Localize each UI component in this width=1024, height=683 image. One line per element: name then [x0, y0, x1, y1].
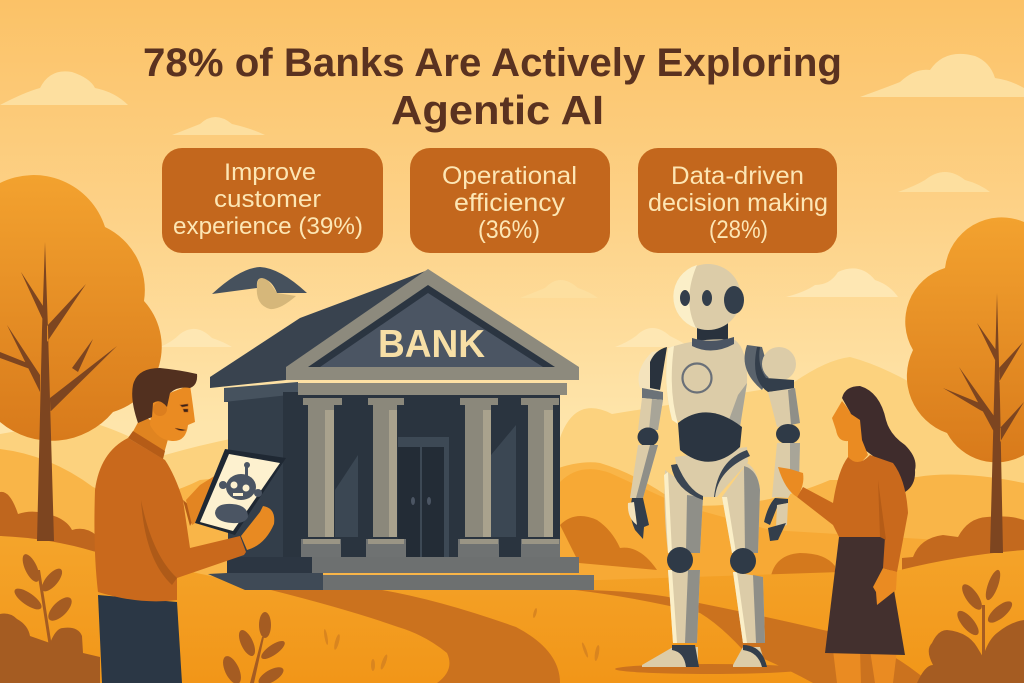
bank pediment: [286, 269, 579, 380]
callout: operational efficiency: efficiency: [454, 189, 566, 217]
robot waist: [678, 412, 742, 462]
bank steps: [227, 557, 312, 573]
background hills: [0, 357, 1024, 683]
bank frieze: [298, 383, 567, 395]
man trousers: [98, 595, 182, 683]
man hair: [132, 368, 197, 423]
man ear: [153, 402, 167, 416]
callout: improve customer experience: [162, 148, 383, 253]
man front hand: [241, 506, 274, 550]
icon: bird: [212, 267, 307, 309]
man eye: [175, 404, 188, 431]
bushes: [0, 492, 1024, 583]
title: 78% of Banks Are Actively Exploring: [143, 41, 842, 85]
decorative plants: [0, 552, 1024, 683]
woman lower hand: [873, 568, 897, 605]
bank label: BANK: [378, 323, 485, 366]
clouds: [0, 54, 1024, 347]
bank roof: [210, 270, 428, 388]
man sweater: [94, 438, 246, 601]
robot legs: [642, 463, 767, 667]
woman sweater: [797, 455, 908, 572]
bank side wall: [224, 388, 300, 557]
man head: [150, 385, 195, 441]
foreground ground: [0, 536, 1024, 683]
woman skirt: [825, 537, 905, 655]
callout: data-driven decision making: [638, 148, 837, 253]
robot shadow: [615, 664, 805, 674]
callout: improve customer experience: Improve: [224, 159, 316, 186]
bank front wall: [283, 392, 560, 557]
callout: data-driven decision making: Data-driven: [671, 162, 804, 190]
bank columns: [301, 398, 560, 557]
woman legs: [833, 650, 897, 683]
robot head: [673, 264, 744, 330]
woman raised hand: [778, 467, 803, 497]
robot right arm: [745, 345, 800, 541]
robot neck: [697, 322, 728, 342]
man with tablet: [94, 368, 286, 683]
robot chest ring: [682, 364, 712, 392]
robot left arm: [628, 347, 667, 539]
robot torso: [666, 339, 747, 427]
callout: improve customer experience: experience (39%): [173, 213, 363, 240]
bank door: [398, 437, 449, 557]
bank building: [208, 269, 594, 590]
tablet: [195, 449, 286, 535]
woman: [778, 386, 916, 683]
callout: data-driven decision making: decision making: [648, 189, 828, 217]
title: [143, 41, 842, 133]
callout: operational efficiency: Operational: [442, 162, 577, 190]
callout: operational efficiency: [410, 148, 610, 253]
woman face: [832, 401, 868, 466]
right tree: [905, 217, 1024, 553]
title: Agentic AI: [391, 87, 604, 133]
robot pelvis: [675, 447, 748, 497]
robot: [615, 264, 805, 674]
callout: data-driven decision making: (28%): [709, 216, 768, 244]
left tree: [0, 175, 162, 541]
callout: improve customer experience: customer: [214, 186, 321, 213]
tablet robot icon: [215, 462, 262, 523]
woman hair: [842, 386, 916, 492]
grass tufts: [323, 608, 600, 671]
man neck: [130, 415, 170, 457]
winding road: [271, 590, 930, 683]
callout: operational efficiency: (36%): [478, 216, 540, 244]
man back hand: [186, 475, 216, 525]
robot collar: [692, 337, 734, 351]
